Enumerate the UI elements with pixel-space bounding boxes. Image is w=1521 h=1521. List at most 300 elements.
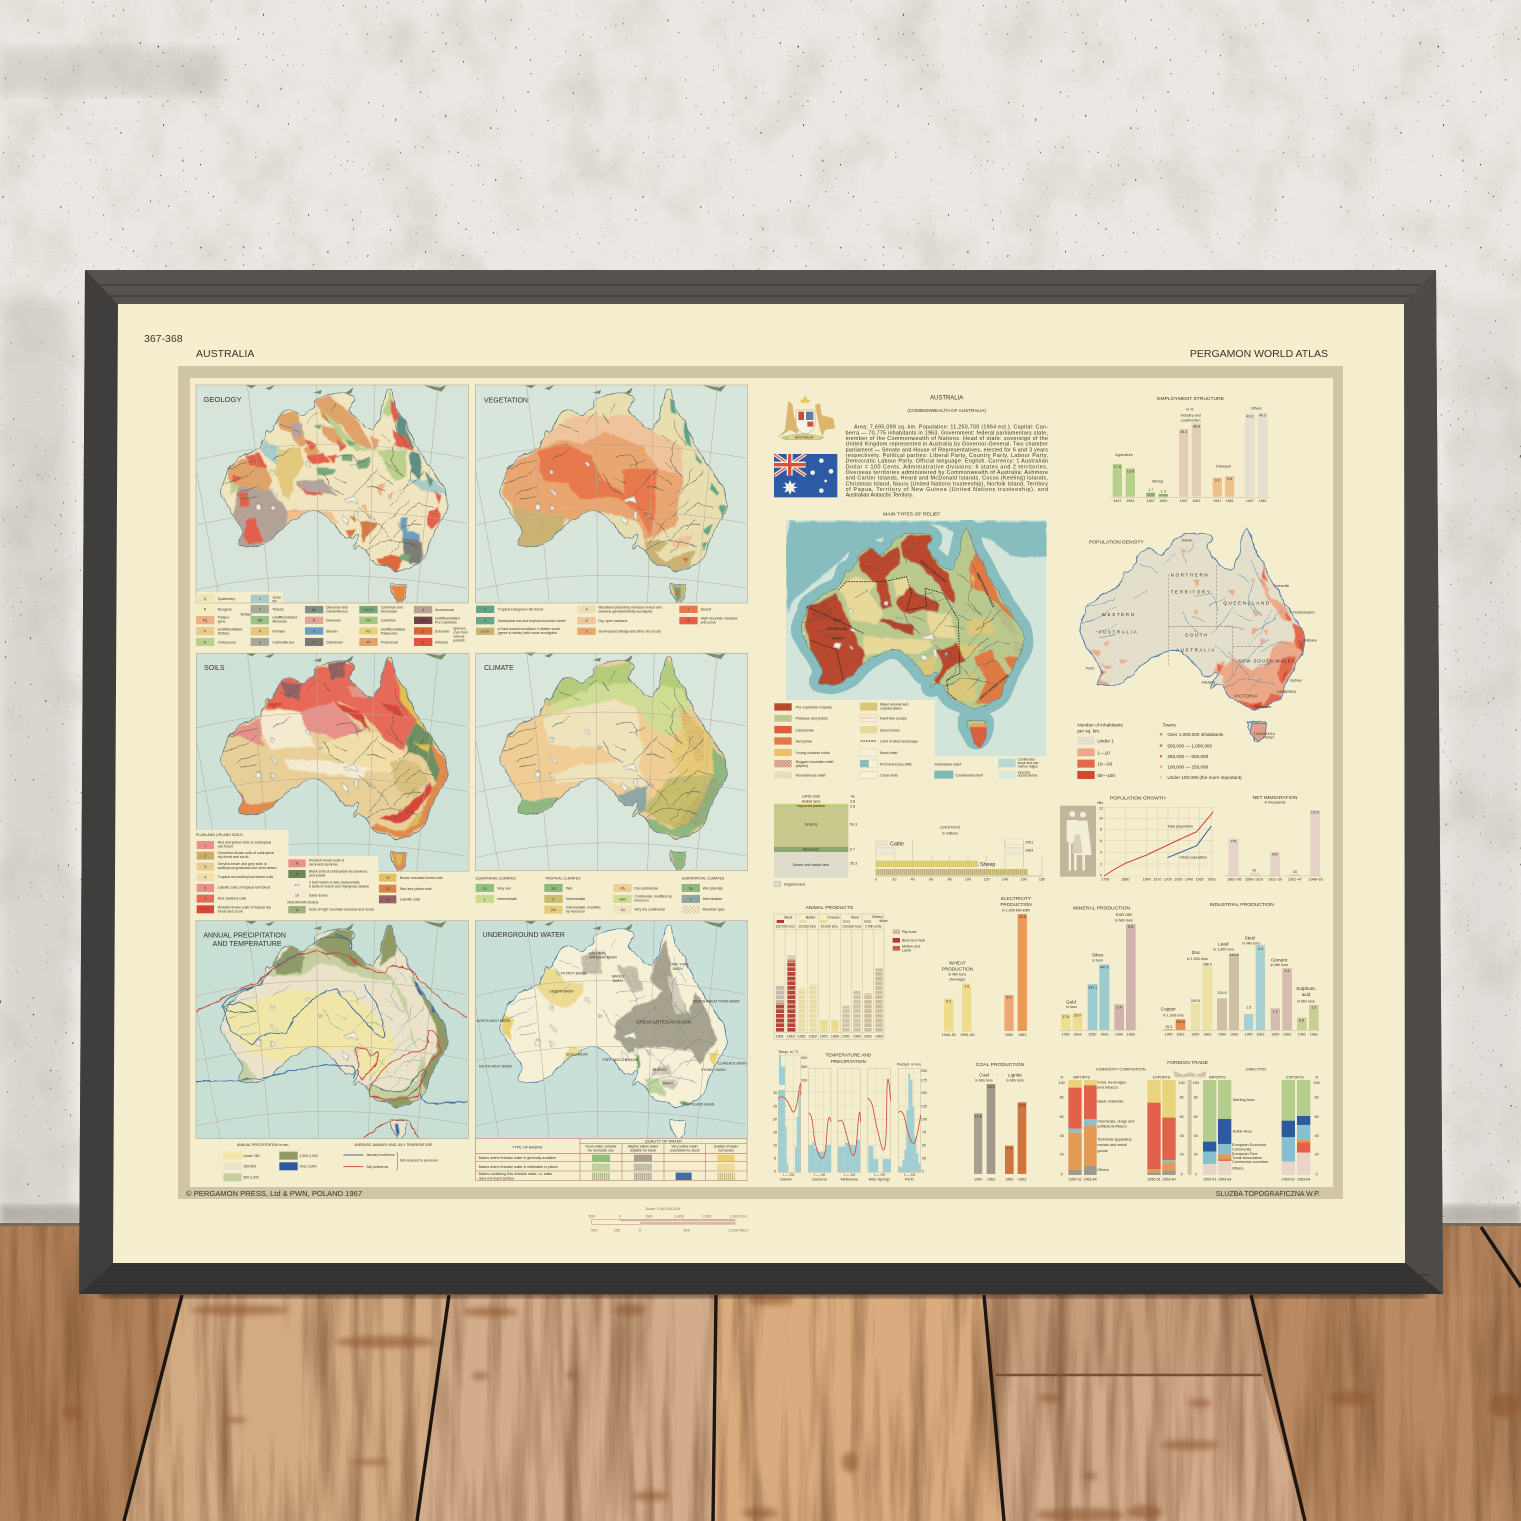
foreign trade charts: Dollar Area — [1233, 1130, 1252, 1134]
employment structure chart: 1947 — [1246, 499, 1254, 503]
temperature and precipitation charts: 200 — [921, 1069, 927, 1073]
vegetation legend: and scrub — [701, 620, 716, 624]
foreign trade charts: 1963-64 — [1083, 1178, 1097, 1182]
relief legend: Sea and — [1018, 770, 1030, 774]
foreign trade charts: IMPORTS — [1073, 1075, 1091, 1079]
climate legend: Mountain type — [703, 908, 725, 912]
mineral production chart: in tons — [1066, 1005, 1077, 1009]
geology legend: C — [259, 640, 262, 644]
geology legend: Silurian — [326, 629, 338, 633]
wheat production chart: 1948–52 — [942, 1033, 956, 1037]
industrial production chart: in 1,000 tons — [1163, 1014, 1184, 1018]
soils legend: Lateritic soils of tropical rain forest — [218, 886, 270, 890]
geology legend: Devonian — [326, 619, 341, 623]
industrial production chart: 204.8 — [1217, 991, 1227, 995]
electricity production chart: in 1,000 Mln kWh — [1002, 908, 1030, 912]
foreign trade charts: % — [1060, 1075, 1064, 1079]
mineral production chart: Silver — [1092, 953, 1104, 958]
heading: UNDERGROUND WATER — [483, 932, 565, 939]
geology legend: β — [422, 629, 424, 633]
soils legend: Brown mountain-forest soils — [400, 876, 443, 880]
mineral production chart: 1950 — [1115, 1033, 1123, 1037]
precipitation legend: AVERAGE JANUARY AND JULY TEMPERATURE — [354, 1143, 433, 1147]
foreign trade charts: Basic materials — [1097, 1100, 1123, 1104]
relief map: BARKLY TABLELAND — [919, 559, 948, 584]
basin names: SOUTH-WEST BASIN — [479, 1064, 512, 1068]
population growth chart: 1920 — [1164, 878, 1172, 882]
industrial production chart: 1963 — [1283, 1033, 1291, 1037]
climate legend: 2A — [621, 886, 625, 890]
employment structure chart: Transport — [1216, 464, 1231, 468]
foreign trade charts: artificial fertilizers — [1097, 1124, 1127, 1128]
animal products chart: 1963 — [875, 1034, 883, 1038]
employment structure chart: Mining — [1152, 480, 1163, 484]
basin names: NORTH-WEST BASIN — [477, 1019, 511, 1023]
population density legend: per sq. km. — [1077, 729, 1100, 734]
land use chart: Irrigated land — [784, 883, 805, 887]
relief heading: MAIN TYPES OF RELIEF — [883, 512, 940, 518]
population density legend: 50—100 — [1097, 773, 1115, 778]
mineral production chart: 447.0 — [1100, 965, 1109, 969]
foreign trade charts — [1059, 1060, 1320, 1182]
soils legend: dry forest and scrub — [218, 855, 249, 859]
map place names: TERRITORY — [1171, 589, 1211, 594]
vegetation legend: Tropical evergreen rain forest — [498, 608, 543, 612]
climate legend: 1a — [483, 886, 487, 890]
land use chart: Arable land — [802, 800, 820, 804]
animal products chart: Pig meat — [902, 930, 916, 934]
soils legend: subtropical grassland and semi-desert — [218, 866, 277, 870]
soils legend: PLAIN AND UPLAND SOILS — [196, 833, 243, 837]
paper sheet — [113, 304, 1405, 1263]
employment structure chart: 1961 — [1159, 499, 1167, 503]
soils legend: 2 — [204, 854, 206, 858]
climate legend: Continental, modified by — [634, 895, 672, 899]
net immigration chart: in thousands — [1265, 801, 1286, 805]
soils legend: MOUNTAIN SOILS — [287, 900, 319, 904]
foreign trade charts: 1963-64 — [1218, 1178, 1231, 1182]
relief map — [786, 520, 1047, 757]
foreign trade charts: 60 — [1315, 1115, 1319, 1119]
soils legend: Red savanna soils — [218, 896, 246, 900]
geology legend: P — [259, 629, 262, 633]
country facts text: respectively. Political parties: Liberal Party, Country Party, Labour Party, — [846, 453, 1048, 459]
direction imports bars — [1203, 1080, 1231, 1175]
livestock chart: Sheep — [980, 862, 995, 868]
climate legend: by monsoon — [566, 909, 585, 913]
basin names: BARKLY — [612, 975, 626, 979]
temperature and precipitation charts: I — XII — [814, 1173, 825, 1177]
soils legend: b Soils of marsh and mangrove swamp — [309, 884, 369, 888]
soils legend: 8 — [296, 862, 298, 866]
basin names: DESERT BASIN — [549, 990, 574, 994]
net immigration chart: 1373 — [1311, 810, 1319, 814]
animal products chart: 20,000 tons — [799, 925, 816, 929]
basin names: BASIN — [613, 979, 623, 983]
foreign trade charts: Community — [1232, 1148, 1251, 1152]
industrial production chart: Sulphuric — [1296, 986, 1316, 991]
soils legend: Reddish-brown soils of — [309, 859, 344, 863]
soils legend: 12 — [386, 876, 390, 880]
animal products chart: 1963 — [831, 1034, 839, 1038]
electricity production chart — [1000, 896, 1032, 1037]
relief legend: Young volcanic rocks — [796, 751, 830, 755]
animal products chart: Meat — [784, 916, 792, 920]
basin names: GIPPSLAND BASIN — [684, 1102, 715, 1106]
country facts text: berra — 70,775 inhabitants in 1963. Government: federal parliamentary state, — [846, 430, 1048, 436]
geology legend: periods — [453, 638, 465, 642]
geology legend: D — [313, 619, 316, 623]
population density map: Adelaide — [1202, 680, 1215, 684]
temperature and precipitation charts: I — XII — [844, 1173, 855, 1177]
geology legend: rock from — [453, 630, 468, 634]
geology legend: S — [313, 629, 316, 633]
industrial production chart: 3.1 — [1284, 969, 1290, 973]
coal production chart: Lignite — [1008, 1073, 1022, 1078]
foreign trade charts: 80 — [1194, 1095, 1198, 1099]
land use chart: 2.8 — [850, 804, 855, 808]
temperature and precipitation charts: 20 — [773, 1118, 777, 1122]
net immigration chart: 775 — [1230, 839, 1236, 843]
scale bar: 0 — [639, 1227, 642, 1232]
temperature and precipitation charts: 25 — [773, 1104, 777, 1108]
geology legend: Palaeozoic — [381, 631, 398, 635]
soils legend: 13 — [386, 887, 390, 891]
foreign trade charts: 40 — [1180, 1134, 1184, 1138]
foreign trade charts: Communist countries — [1232, 1160, 1268, 1164]
soils legend: Red and yellow soils — [400, 887, 432, 891]
animal products chart: skins — [879, 919, 888, 923]
temperature and precipitation charts: I — XII — [874, 1173, 885, 1177]
temperature and precipitation charts: 125 — [921, 1104, 927, 1108]
relief map: WEST — [833, 619, 843, 623]
map place names: AUSTRALIA — [1098, 629, 1138, 634]
basin names: DALY AND — [589, 951, 606, 955]
electricity production chart: 25.0 — [1019, 915, 1026, 919]
underground water legend table: Very saline water — [671, 1144, 699, 1148]
scale bar: 2,000 Km — [730, 1213, 748, 1218]
livestock chart: 160 — [1021, 878, 1027, 882]
employment structure chart: 38.8 — [1193, 425, 1200, 429]
mineral production chart: 5.5 — [1128, 925, 1133, 929]
livestock chart: Cattle — [890, 841, 904, 847]
animal products chart: 1951 — [864, 1034, 872, 1038]
geology legend: Ordovician — [381, 610, 397, 614]
vegetation legend: 4 — [586, 608, 588, 612]
temperature and precipitation charts: 150 — [921, 1091, 927, 1095]
land use chart: LAND USE — [802, 794, 821, 798]
climate legend: 2Am — [619, 897, 626, 901]
geology legend: Undifferentiated — [218, 627, 242, 631]
land use chart: 54.3 — [850, 823, 857, 827]
industrial production chart: Cement — [1271, 957, 1288, 962]
foreign trade charts: 1950-51 — [1203, 1178, 1216, 1182]
population density legend: Under 1 — [1097, 739, 1114, 744]
foreign trade charts: 80 — [1180, 1095, 1184, 1099]
foreign trade charts: 80 — [1315, 1095, 1319, 1099]
foreign trade charts: Sterling Area — [1233, 1098, 1255, 1102]
commodity imports bars — [1068, 1080, 1097, 1175]
soils legend: 14 — [386, 898, 390, 902]
temperature and precipitation charts: 10 — [773, 1143, 777, 1147]
mineral production chart — [1059, 905, 1137, 1037]
cartographer credit: SLUZBA TOPOGRAFICZNA W.P. — [1216, 1191, 1320, 1198]
population density map: Perth — [1086, 666, 1094, 670]
industrial production chart: 1.2 — [1273, 1010, 1278, 1014]
animal products chart: 1951 — [820, 1034, 828, 1038]
animal products chart: Beef and Veal — [902, 939, 925, 943]
map place names: TASMANIA — [1253, 732, 1275, 736]
basin names: FITZROY BASIN — [561, 971, 587, 975]
wheat production chart: WHEAT — [949, 960, 966, 965]
net immigration chart: NET IMMIGRATION — [1253, 795, 1298, 801]
underground water legend table: Good water suitable — [585, 1144, 617, 1148]
relief legend: Caledonian — [796, 728, 814, 732]
electricity production chart: 9.5 — [1006, 996, 1012, 1000]
foreign trade charts: Chemicals, drugs and — [1097, 1120, 1134, 1124]
geology legend: Cambrian and — [381, 606, 403, 610]
vegetation legend: 5 — [586, 619, 588, 623]
industrial production chart: acid — [1302, 992, 1311, 997]
wheat production chart: (Average) — [949, 977, 965, 981]
vegetation legend: Desert — [701, 608, 711, 612]
soils legend: 4 — [204, 876, 206, 880]
page number: 367-368 — [144, 333, 183, 345]
climate legend: EQUATORIAL CLIMATES — [476, 876, 516, 880]
foreign trade charts: 1950-51 — [1147, 1178, 1161, 1182]
land use chart: Desert and waste land — [793, 863, 829, 867]
mineral production chart: Iron ore — [1116, 912, 1132, 917]
industrial production chart: in Mln tons — [1242, 941, 1260, 945]
precipitation legend: 1,000-2,000 — [299, 1154, 318, 1158]
geology legend: Juras- — [272, 595, 282, 599]
relief map: SHIELD — [832, 636, 844, 640]
industrial production chart: Steel — [1245, 935, 1255, 940]
livestock chart: 120 — [984, 878, 990, 882]
basin names: CAPE YORK — [669, 962, 689, 966]
soils legend: 1 — [204, 843, 206, 847]
electricity production chart: 1963 — [1018, 1033, 1026, 1037]
temperature and precipitation charts: 0 — [774, 1169, 776, 1173]
soils legend: Reddish-brown soils of tropical dry — [218, 905, 271, 909]
soils legend: Soils of high mountain meadow and scrub — [309, 908, 374, 912]
basin names: BOWEN-GREAT RIVER BASIN — [693, 1000, 740, 1004]
relief legend: (Alpine) — [796, 764, 808, 768]
relief legend: Prominent sea cliffs — [880, 762, 912, 766]
foreign trade charts: 1963-64 — [1162, 1178, 1176, 1182]
soils legend: 9 — [296, 872, 298, 876]
relief legend — [770, 700, 1048, 780]
precipitation legend: ANNUAL PRECIPITATION in mm — [237, 1143, 289, 1147]
mineral production chart: 29.0 — [1074, 1014, 1081, 1018]
vegetation legend: Subtropical wet and tropical mountain forest — [498, 619, 565, 623]
vegetation legend: savanna (predominantly eucalypts) — [598, 609, 652, 613]
employment structure chart: 17.6 — [1114, 465, 1121, 469]
basin names: EUCLA BASIN — [566, 1052, 588, 1056]
temperature and precipitation charts: 200 — [801, 1078, 807, 1082]
basin names: ARTESIAN BASIN — [589, 956, 617, 960]
foreign trade charts: 20 — [1060, 1153, 1064, 1157]
industrial production chart: 1950 — [1298, 1033, 1306, 1037]
geology map — [196, 385, 468, 603]
population growth chart: 1940 — [1185, 878, 1193, 882]
foreign trade charts: 0 — [1316, 1172, 1318, 1176]
vegetation legend: 7 — [687, 608, 689, 612]
scale bar — [588, 1206, 749, 1232]
land use chart: 6.7 — [850, 847, 855, 851]
population density legend: Under 100,000 (the more important) — [1167, 775, 1242, 780]
wheat production chart: 5.3 — [946, 1000, 951, 1004]
foreign trade charts: 40 — [1315, 1134, 1319, 1138]
foreign trade charts: metals and metal — [1097, 1143, 1127, 1147]
animal products chart — [774, 905, 925, 1039]
geology legend: Tr — [203, 629, 207, 633]
mineral production chart: 37.8 — [1062, 1015, 1069, 1019]
precipitation legend: January isotherms — [366, 1153, 395, 1157]
underground water legend table: Slightly saline water — [628, 1144, 659, 1148]
basin names: CLARENCE BASIN — [718, 1061, 747, 1065]
land use chart: Woodland — [803, 847, 819, 851]
map place names: NORTHERN — [1171, 573, 1209, 578]
foreign trade charts: 1963-64 — [1297, 1178, 1310, 1182]
population density map: Rockhampton — [1293, 610, 1315, 614]
temperature and precipitation charts: 0 — [922, 1169, 924, 1173]
industrial production chart: in 1,000 tons — [1187, 957, 1208, 961]
foreign trade charts: EXPORTS — [1153, 1075, 1171, 1079]
population growth chart: 1910 — [1153, 878, 1161, 882]
temperature and precipitation charts: Temp. in °C — [778, 1049, 799, 1054]
electricity production chart: PRODUCTION — [1000, 902, 1032, 907]
livestock chart: 1963 — [1025, 849, 1033, 853]
geology legend: Intrusive — [435, 640, 448, 644]
employment structure chart: EMPLOYMENT STRUCTURE — [1157, 396, 1225, 402]
animal products chart: Butter — [806, 916, 816, 920]
employment structure chart: 40.2 — [1246, 414, 1254, 418]
geology legend: T — [259, 607, 262, 611]
livestock chart: 40 — [911, 878, 915, 882]
underground water legend table: Basins containing Sub-Artesian water, i.e. water — [479, 1172, 553, 1176]
geology legend: O — [313, 640, 316, 644]
population density legend: 500,000 — 1,000,000 — [1167, 743, 1213, 748]
land use chart: % — [851, 794, 855, 799]
soils legend: Sand dunes — [309, 893, 328, 897]
geology legend: Q — [204, 597, 207, 601]
foreign trade charts: 1950-51 — [1068, 1178, 1082, 1182]
temperature and precipitation charts: 175 — [921, 1078, 927, 1082]
livestock chart: 180 — [1039, 878, 1045, 882]
temperature and precipitation charts: 15 — [773, 1131, 777, 1135]
climate legend: 2m — [551, 908, 556, 912]
geology legend: Carboniferous — [326, 610, 348, 614]
population growth chart — [1060, 795, 1215, 882]
map place names: AUSTRALIA — [1176, 648, 1216, 653]
foreign trade charts: 0 — [1181, 1172, 1183, 1176]
livestock chart: in millions — [942, 831, 958, 835]
land use chart: Grazing — [805, 823, 817, 827]
population growth chart: 8 — [1100, 828, 1102, 832]
industrial production chart: 1963 — [1230, 1033, 1238, 1037]
climate legend: Very dry continental — [634, 908, 665, 912]
foreign trade charts: 100 — [1314, 1081, 1320, 1085]
net immigration chart: 30 — [1293, 870, 1297, 874]
population growth chart: 1790 — [1101, 878, 1109, 882]
livestock chart: 20 — [892, 878, 896, 882]
climate legend: Dry continental — [634, 886, 658, 890]
industrial production chart: 1.3 — [1311, 1006, 1316, 1010]
geology legend: Mesozoic — [272, 620, 287, 624]
land use chart: Improved pasture — [797, 804, 825, 808]
coal production chart: 1950 — [974, 1178, 982, 1182]
foreign trade charts: Technical apparatus, — [1097, 1138, 1132, 1142]
industrial production chart — [1161, 902, 1320, 1037]
direction exports bars — [1282, 1080, 1310, 1175]
heading: GEOLOGY — [203, 395, 242, 404]
employment structure chart: 9.2 — [1215, 478, 1220, 482]
foreign trade charts: Others — [1232, 1166, 1244, 1170]
vegetation legend: Woodland (including monsoon forest and — [598, 605, 662, 609]
foreign trade charts: Trade Association — [1232, 1156, 1262, 1160]
climate legend: 2 — [552, 897, 554, 901]
animal products chart: 1951 — [776, 1034, 784, 1038]
geology legend: Palaeo- — [218, 616, 230, 620]
country facts text: member of the Commonwealth of Nations. Head of state: sovereign of the — [846, 436, 1048, 442]
temperature and precipitation charts: PRECIPITATION — [831, 1059, 866, 1064]
geology legend: Tertiary — [218, 631, 229, 635]
mineral production chart: 333.1 — [1088, 986, 1097, 990]
underground water legend table: for domestic use — [588, 1149, 614, 1153]
population density map: Hobart — [1263, 736, 1274, 740]
coal production chart: 1950 — [1005, 1178, 1013, 1182]
foreign trade charts: COMMODITY COMPOSITION — [1096, 1068, 1146, 1072]
electricity production chart: 1950 — [1005, 1033, 1013, 1037]
heading: SOILS — [204, 665, 225, 672]
country facts text: and Cartier Islands, Heard and McDonald Islands, Cocos (Keeling) Islands, — [846, 476, 1048, 482]
net immigration chart: 1861–95 — [1227, 878, 1241, 882]
country facts text — [846, 425, 1048, 499]
foreign trade charts: % — [1315, 1075, 1319, 1079]
country facts text: parliament — Senate and House of Representatives, elected for 6 and 3 years — [846, 447, 1048, 453]
industrial production chart: in Mln tons — [1297, 999, 1315, 1003]
basin names: GREAT ARTESIAN BASIN — [636, 1019, 691, 1024]
wheat production chart: PRODUCTION — [942, 966, 973, 971]
population density legend: 100,000 — 250,000 — [1167, 764, 1209, 769]
industrial production chart: 1950 — [1271, 1033, 1279, 1037]
vegetation legend — [476, 385, 748, 635]
scale bar: Scale 1:40,000,000 — [645, 1206, 681, 1211]
geology legend: Triassic — [272, 607, 284, 611]
scale bar: 250 — [614, 1227, 621, 1232]
foreign trade charts: 60 — [1180, 1115, 1184, 1119]
geology legend: γ — [422, 640, 424, 644]
geology legend: Ordovician — [326, 640, 343, 644]
employment structure chart: Agriculture — [1115, 453, 1133, 457]
publisher credit: © PERGAMON PRESS, Ltd & PWN, POLAND 1967 — [186, 1189, 362, 1198]
map sheet band — [178, 366, 1343, 1199]
industrial production chart: INDUSTRIAL PRODUCTION — [1209, 902, 1274, 908]
relief legend: Hercynian — [796, 740, 812, 744]
industrial production chart: 200.8 — [1191, 999, 1200, 1003]
vegetation legend: 8 — [687, 619, 689, 623]
coal production chart: 1963 — [987, 1178, 995, 1182]
relief legend: Submarine relief — [934, 763, 962, 767]
employment structure chart: 1947 — [1180, 499, 1188, 503]
country facts text: Overseas territories administered by Commonwealth of Australia: Ashmore — [846, 470, 1048, 476]
panel: underground water — [475, 920, 747, 1181]
underground water legend table: not tested — [718, 1149, 734, 1153]
industrial production chart: 1963 — [1176, 1033, 1184, 1037]
geology legend: Undifferentiated — [435, 616, 460, 620]
foreign trade charts: 20 — [1315, 1153, 1319, 1157]
